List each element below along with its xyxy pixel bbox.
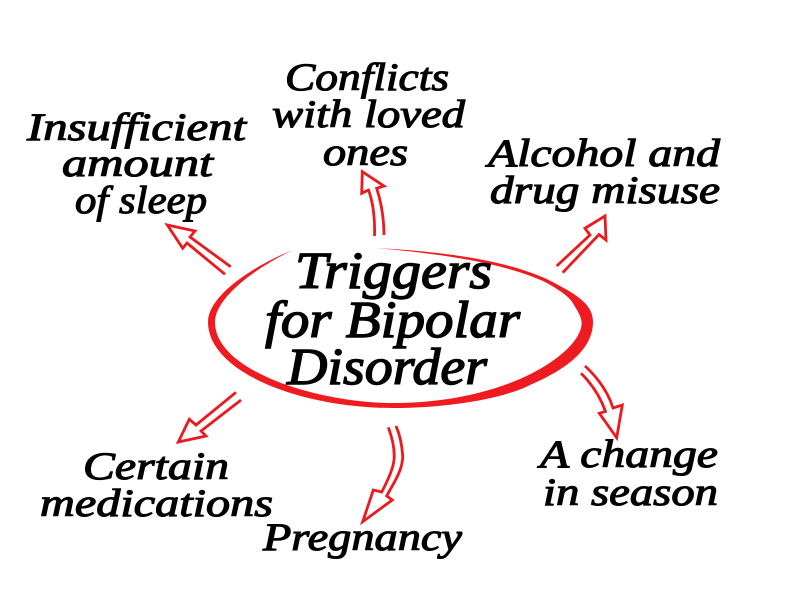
label: a change in season: in season — [543, 471, 718, 514]
label: alcohol and drug misuse — [484, 132, 721, 212]
label: a change in season: A change — [536, 433, 718, 476]
label: certain medications — [40, 445, 273, 525]
label: insufficient amount of sleep: of sleep — [75, 179, 207, 222]
label: a change in season — [536, 433, 718, 514]
arrow: to conflicts — [362, 172, 384, 236]
title: for Bipolar — [265, 292, 521, 349]
label: certain medications: Certain — [83, 445, 229, 488]
arrow: to certain medications — [178, 392, 241, 442]
arrow: to alcohol and drug misuse — [557, 216, 606, 273]
title: Triggers — [295, 243, 492, 300]
label: insufficient amount of sleep: amount — [62, 142, 215, 185]
label: alcohol and drug misuse: drug misuse — [490, 169, 720, 212]
arrow: to insufficient sleep — [167, 225, 231, 274]
label: certain medications: medications — [40, 482, 273, 525]
label: conflicts with loved ones — [272, 56, 466, 174]
arrow: to pregnancy — [363, 426, 403, 522]
label: conflicts with loved ones: ones — [323, 131, 408, 174]
title: Disorder — [286, 339, 488, 396]
label: alcohol and drug misuse: Alcohol and — [484, 132, 721, 175]
label: insufficient amount of sleep: Insufficient — [26, 106, 247, 149]
center ellipse: red brush stroke — [208, 248, 593, 408]
label: pregnancy: Pregnancy — [262, 516, 463, 559]
title — [265, 243, 521, 396]
arrow: to change in season — [581, 366, 622, 438]
label: conflicts with loved ones: Conflicts — [285, 56, 449, 99]
label: conflicts with loved ones: with loved — [272, 93, 466, 136]
label: insufficient amount of sleep — [26, 106, 247, 222]
